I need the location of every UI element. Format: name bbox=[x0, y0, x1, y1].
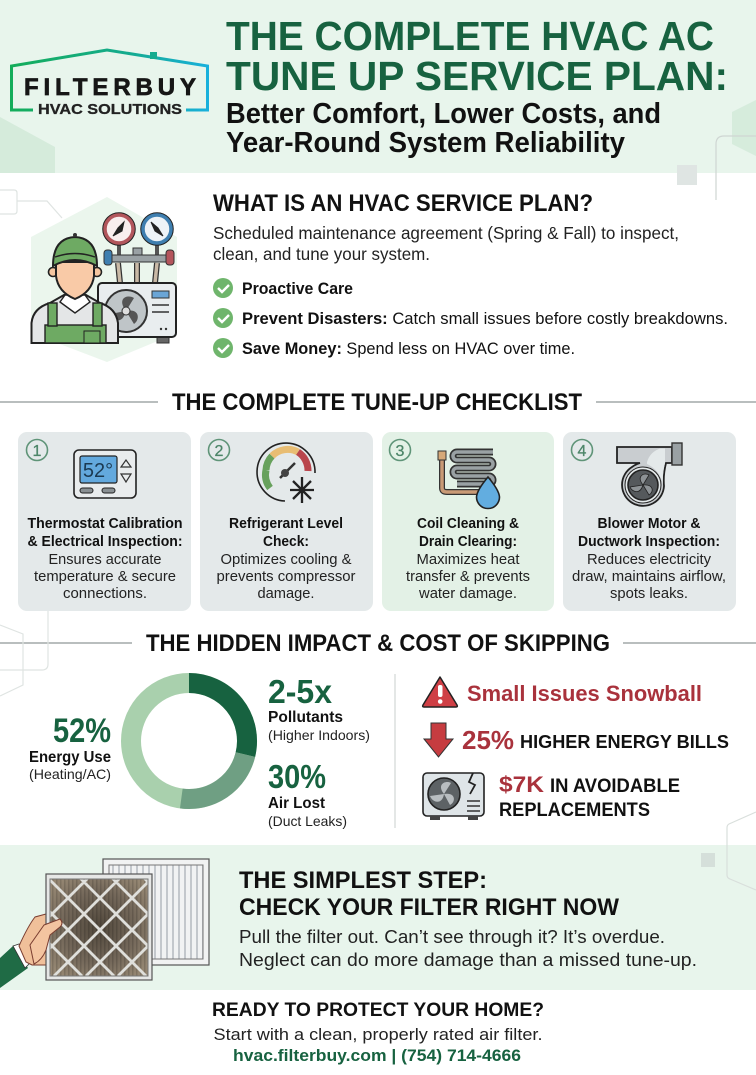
title: THE COMPLETE HVAC AC bbox=[226, 13, 714, 59]
stat: 52% energy: Energy Use bbox=[29, 749, 111, 766]
card 2: refrigerant: damage. bbox=[258, 586, 314, 602]
icon: clean filter bbox=[103, 859, 209, 965]
callout: replacements: $7K bbox=[499, 772, 544, 797]
stat: air lost bbox=[268, 758, 347, 829]
card 1: thermostat: Ensures accurate bbox=[48, 552, 162, 568]
callout: replacements: REPLACEMENTS bbox=[499, 800, 650, 821]
card 2: refrigerant: Optimizes cooling & bbox=[220, 552, 352, 568]
logo bbox=[12, 50, 208, 118]
section: what is an HVAC service plan: Scheduled maintenance agreement (Spring & Fall) to inspect, bbox=[213, 223, 679, 243]
card 2: refrigerant bbox=[200, 432, 373, 611]
icon: dirty filter bbox=[45, 873, 153, 981]
callout: energy bills: HIGHER ENERGY BILLS bbox=[520, 732, 729, 752]
card 4: blower: draw, maintains airflow, bbox=[572, 569, 726, 585]
text: simplest step bbox=[239, 867, 697, 970]
heading: checklist: THE COMPLETE TUNE-UP CHECKLIST bbox=[172, 389, 582, 416]
card 2: refrigerant: Check: bbox=[263, 534, 309, 550]
section: what is an HVAC service plan: clean, and tune your system. bbox=[213, 244, 430, 264]
checklist: proactive care: Proactive Care bbox=[242, 280, 353, 298]
stat: 52% energy: (Heating/AC) bbox=[29, 766, 111, 782]
title: Year-Round System Reliability bbox=[226, 127, 625, 159]
card 4: blower bbox=[563, 432, 736, 611]
card 1: thermostat: temperature & secure bbox=[34, 569, 176, 585]
card 2: refrigerant: Refrigerant Level bbox=[229, 516, 343, 532]
icon: hand back bbox=[0, 914, 60, 988]
card 4: blower: spots leaks. bbox=[610, 586, 688, 602]
callout: energy bills bbox=[424, 723, 729, 757]
AC unit bbox=[157, 336, 169, 343]
card 1: thermostat: connections. bbox=[63, 586, 147, 602]
checklist: proactive care bbox=[213, 278, 353, 298]
card 3: coil: Coil Cleaning & bbox=[417, 516, 519, 532]
logo: HVAC SOLUTIONS bbox=[38, 101, 182, 118]
card 2: refrigerant: prevents compressor bbox=[216, 569, 356, 585]
stat: 52% energy bbox=[29, 712, 111, 782]
card 1: thermostat bbox=[18, 432, 191, 611]
icon: thumb bbox=[30, 919, 62, 964]
stat: pollutants bbox=[268, 673, 370, 743]
stat: 52% energy: 52% bbox=[53, 712, 111, 750]
card 2: refrigerant: 2 bbox=[215, 443, 224, 460]
stat: pollutants: (Higher Indoors) bbox=[268, 727, 370, 743]
card 3: coil: transfer & prevents bbox=[406, 569, 530, 585]
card 1: thermostat: 52° bbox=[83, 460, 113, 482]
title: Better Comfort, Lower Costs, and bbox=[226, 98, 661, 130]
card 3: coil: water damage. bbox=[418, 586, 517, 602]
callout: snowball: Small Issues Snowball bbox=[467, 681, 702, 706]
footer: READY TO PROTECT YOUR HOME? bbox=[212, 1000, 544, 1021]
logo: FILTERBUY bbox=[24, 74, 196, 101]
callout: replacements bbox=[423, 772, 680, 821]
footer: Start with a clean, properly rated air filter. bbox=[214, 1025, 542, 1044]
section: what is an HVAC service plan bbox=[213, 190, 728, 358]
card 4: blower: Reduces electricity bbox=[587, 552, 712, 568]
checklist: save money: Save Money: Spend less on HVAC over time. bbox=[242, 340, 575, 358]
title: TUNE UP SERVICE PLAN: bbox=[226, 53, 728, 99]
text: simplest step: CHECK YOUR FILTER RIGHT NOW bbox=[239, 894, 619, 921]
section: what is an HVAC service plan: WHAT IS AN HVAC SERVICE PLAN? bbox=[213, 190, 593, 217]
panel: simplest step bbox=[0, 812, 756, 990]
stat: pollutants: Pollutants bbox=[268, 709, 343, 726]
title bbox=[226, 13, 728, 159]
header band bbox=[0, 0, 756, 173]
card 4: blower: Blower Motor & bbox=[598, 516, 701, 532]
callout: replacements: IN AVOIDABLE bbox=[550, 776, 680, 797]
callout: energy bills: 25% bbox=[462, 725, 514, 755]
card 4: blower: Ductwork Inspection: bbox=[578, 534, 720, 550]
donut chart bbox=[131, 683, 247, 799]
card 3: coil bbox=[382, 432, 554, 611]
icon: technician with gauges and AC unit bbox=[31, 197, 177, 362]
card 1: thermostat: 1 bbox=[33, 443, 42, 460]
footer bbox=[212, 1000, 544, 1065]
stat: air lost: 30% bbox=[268, 758, 326, 795]
callout: snowball bbox=[423, 677, 702, 707]
stat: air lost: (Duct Leaks) bbox=[268, 813, 347, 829]
checklist: prevent disasters: Prevent Disasters: Catch small issues before costly breakdowns. bbox=[242, 310, 728, 328]
card 4: blower: 4 bbox=[578, 443, 587, 460]
card 3: coil: Maximizes heat bbox=[416, 552, 520, 568]
card 3: coil: 3 bbox=[396, 443, 405, 460]
stat: pollutants: 2-5x bbox=[268, 673, 333, 710]
gauges bbox=[119, 240, 157, 258]
card 1: thermostat: & Electrical Inspection: bbox=[28, 534, 182, 550]
card 3: coil: Drain Clearing: bbox=[419, 534, 517, 550]
footer: hvac.filterbuy.com | (754) 714-4666 bbox=[233, 1046, 521, 1065]
text: simplest step: Pull the filter out. Can’t see through it? It’s overdue. bbox=[239, 927, 665, 947]
person bbox=[32, 295, 118, 343]
stat: air lost: Air Lost bbox=[268, 795, 325, 812]
text: simplest step: THE SIMPLEST STEP: bbox=[239, 867, 487, 894]
text: simplest step: Neglect can do more damage than a missed tune-up. bbox=[239, 950, 697, 970]
card 1: thermostat: Thermostat Calibration bbox=[28, 516, 182, 532]
heading: hidden impact: THE HIDDEN IMPACT & COST OF SKIPPING bbox=[146, 630, 610, 657]
